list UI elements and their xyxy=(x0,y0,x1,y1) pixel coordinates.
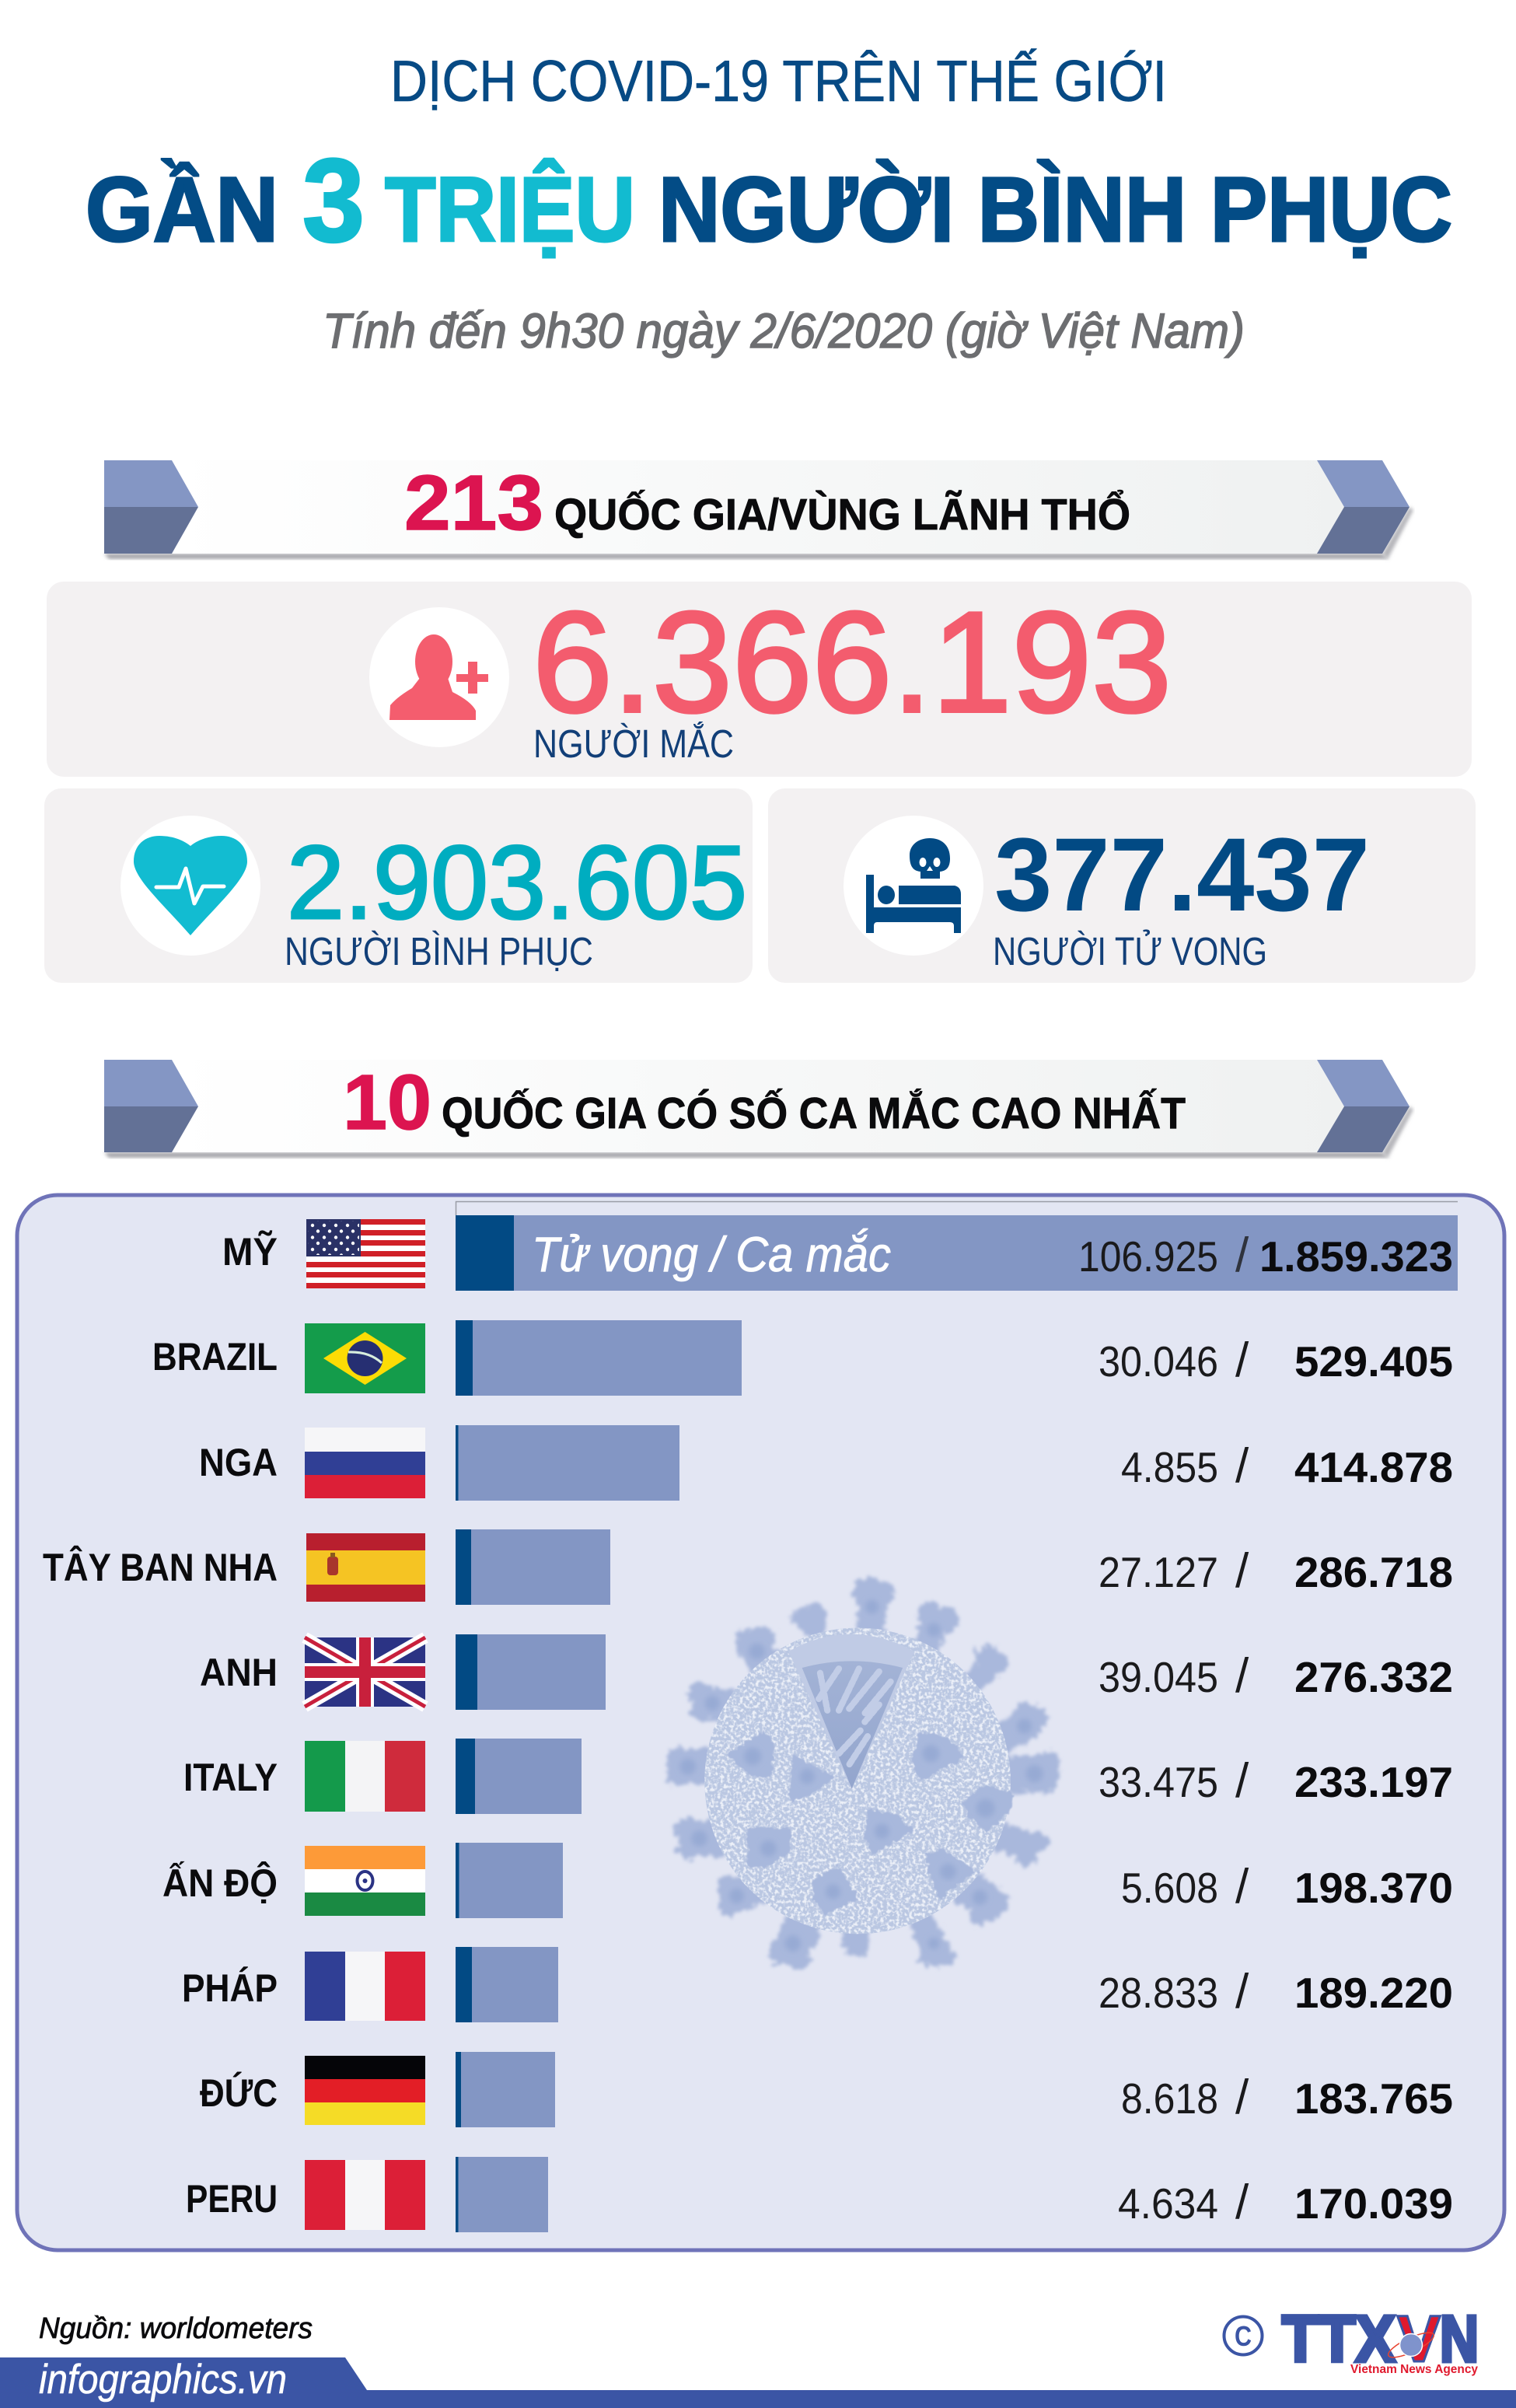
row: France: 189.220 xyxy=(1294,1969,1453,2017)
title: main headline: NGƯỜI BÌNH PHỤC xyxy=(658,159,1452,261)
values: 8.618 xyxy=(1121,2074,1218,2123)
values: 4.855 xyxy=(1121,1443,1218,1491)
values: 28.833 xyxy=(1099,1969,1218,2017)
title: line 1: DỊCH COVID-19 TRÊN THẾ GIỚI xyxy=(390,48,1167,114)
row: Brazil: / xyxy=(1235,1333,1249,1387)
flag: Italy xyxy=(305,1741,425,1812)
label: NGA xyxy=(199,1441,278,1484)
flag: Germany xyxy=(305,2056,425,2125)
row: United States: / xyxy=(1235,1228,1249,1282)
banner: 213 territories: QUỐC GIA/VÙNG LÃNH THỔ xyxy=(554,489,1130,540)
logo: TTXVN: Vietnam News Agency xyxy=(1350,2363,1478,2376)
bar xyxy=(456,1320,742,1396)
bar xyxy=(456,1843,563,1918)
icon: skull and bed xyxy=(866,838,961,933)
panel: recovered xyxy=(44,788,753,983)
bar xyxy=(456,1215,1458,1291)
bar xyxy=(456,1634,606,1710)
logo: TTXVN: V xyxy=(1397,2302,1441,2375)
panel: country chart xyxy=(17,1195,1504,2250)
row: Germany: 183.765 xyxy=(1294,2074,1453,2123)
bar xyxy=(456,1529,610,1605)
banner: top 10 countries: 10 xyxy=(343,1059,431,1146)
source note: Nguồn: worldometers xyxy=(39,2312,313,2345)
row: Italy: 233.197 xyxy=(1294,1758,1453,1806)
flag: UK xyxy=(305,1637,425,1707)
row: Peru: / xyxy=(1235,2176,1249,2229)
label: deaths: NGƯỜI TỬ VONG xyxy=(993,928,1267,973)
icon: person plus xyxy=(389,634,488,720)
banner: top 10 countries: QUỐC GIA CÓ SỐ CA MẮC CAO NHẤT xyxy=(442,1088,1186,1138)
subtitle: date: Tính đến 9h30 ngày 2/6/2020 (giờ Việt Nam) xyxy=(323,304,1245,358)
banner: 213 territories xyxy=(104,460,1413,559)
row: India: 198.370 xyxy=(1294,1864,1453,1912)
row: India xyxy=(162,1843,1453,1918)
row: France: / xyxy=(1235,1965,1249,2018)
flag: Brazil xyxy=(305,1323,425,1393)
row: United Kingdom: / xyxy=(1235,1649,1249,1703)
row: India: / xyxy=(1235,1860,1249,1913)
row: Russia xyxy=(199,1425,1453,1501)
values: 4.634 xyxy=(1118,2179,1218,2228)
values: 106.925 xyxy=(1078,1232,1218,1281)
panel: deaths xyxy=(768,788,1476,983)
row: Germany xyxy=(200,2052,1453,2127)
row: Spain: 286.718 xyxy=(1294,1548,1453,1596)
label: cases: NGƯỜI MẮC xyxy=(533,721,734,766)
row: France xyxy=(182,1947,1453,2022)
number: cases: 6.366.193 xyxy=(533,582,1172,742)
number: recovered: 2.903.605 xyxy=(287,825,747,941)
label: PHÁP xyxy=(182,1966,278,2010)
row: United States xyxy=(222,1215,1458,1291)
row: Peru xyxy=(186,2157,1453,2232)
values: 39.045 xyxy=(1099,1653,1218,1701)
bar xyxy=(456,1947,558,2022)
axis line xyxy=(456,1202,1458,1215)
title: main headline: 3 xyxy=(302,135,365,267)
flag: India xyxy=(305,1846,425,1916)
row: Spain: / xyxy=(1235,1544,1249,1598)
row: Russia: / xyxy=(1235,1439,1249,1493)
flag: Spain xyxy=(306,1533,425,1602)
flag: USA xyxy=(306,1219,425,1288)
flag: France xyxy=(305,1952,425,2021)
label: ITALY xyxy=(183,1756,278,1799)
title: main headline: GẦN xyxy=(86,158,278,261)
row: Peru: 170.039 xyxy=(1294,2179,1453,2228)
logo: TTXVN xyxy=(1224,2302,1479,2376)
logo: TTXVN: TTX xyxy=(1282,2302,1395,2375)
label: BRAZIL xyxy=(152,1335,278,1379)
title: main headline xyxy=(86,135,1452,267)
row: Italy xyxy=(183,1739,1453,1814)
label: PERU xyxy=(186,2177,278,2221)
row: Italy: / xyxy=(1235,1754,1249,1808)
legend caption: Tử vong / Ca mắc xyxy=(532,1228,891,1282)
copyright mark xyxy=(1224,2317,1263,2354)
bar xyxy=(456,1739,582,1814)
row: United Kingdom xyxy=(200,1634,1453,1710)
row: Brazil: 529.405 xyxy=(1294,1337,1453,1386)
label: recovered: NGƯỜI BÌNH PHỤC xyxy=(285,929,593,973)
copyright mark: C xyxy=(1235,2320,1252,2352)
bar xyxy=(456,2052,555,2127)
panel: confirmed cases xyxy=(47,582,1472,777)
label: ĐỨC xyxy=(200,2071,278,2115)
row: United States: 1.859.323 xyxy=(1259,1232,1453,1281)
number: deaths: 377.437 xyxy=(994,817,1370,933)
banner: 213 territories: 213 xyxy=(404,460,543,547)
values: 30.046 xyxy=(1099,1337,1218,1386)
bar xyxy=(456,2157,548,2232)
flag: Russia xyxy=(305,1428,425,1498)
icon: heart with pulse xyxy=(134,836,247,935)
virus body xyxy=(704,1628,1011,1934)
row: Russia: 414.878 xyxy=(1294,1443,1453,1491)
website: infographics.vn xyxy=(39,2357,287,2403)
flag: Peru xyxy=(305,2160,425,2230)
row: Brazil xyxy=(152,1320,1453,1396)
values: 33.475 xyxy=(1099,1758,1218,1806)
footer bar xyxy=(0,2357,1516,2408)
label: ANH xyxy=(200,1651,278,1694)
label: TÂY BAN NHA xyxy=(43,1546,278,1589)
row: Spain xyxy=(43,1529,1453,1605)
title: main headline: TRIỆU xyxy=(385,158,635,261)
label: MỸ xyxy=(222,1230,278,1274)
bar xyxy=(456,1425,679,1501)
row: Germany: / xyxy=(1235,2071,1249,2124)
illustration: coronavirus xyxy=(667,1577,1060,1969)
logo: TTXVN: N xyxy=(1440,2302,1479,2375)
label: ẤN ĐỘ xyxy=(162,1861,278,1905)
row: United Kingdom: 276.332 xyxy=(1294,1653,1453,1701)
banner: top 10 countries xyxy=(104,1059,1413,1158)
values: 5.608 xyxy=(1121,1864,1218,1912)
values: 27.127 xyxy=(1099,1548,1218,1596)
